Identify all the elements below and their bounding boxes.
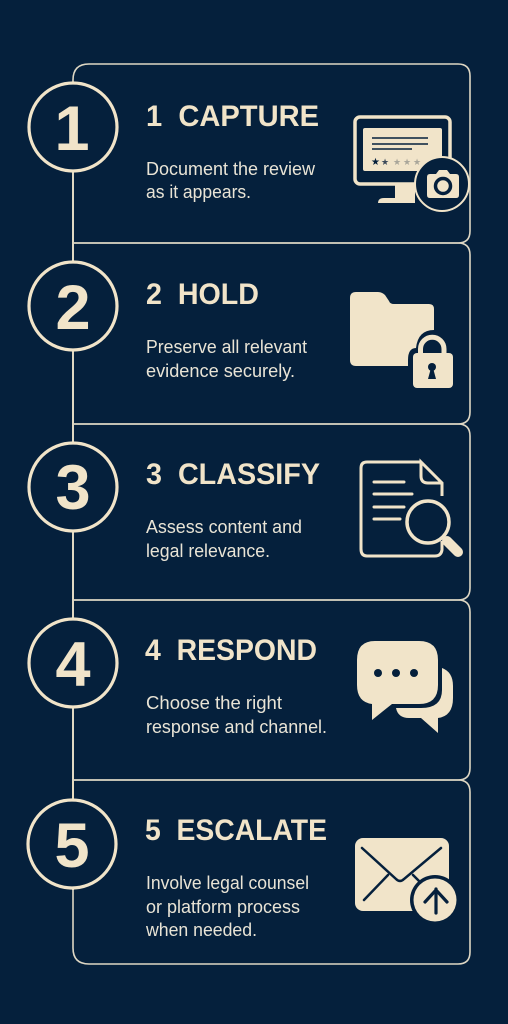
- icon: monitor with review and camera: ★: [393, 157, 401, 167]
- step 1 number: 1: [54, 94, 90, 164]
- icon: monitor with review and camera: ★: [371, 157, 380, 168]
- step 2 description: [146, 337, 307, 381]
- panel: step 1 capture: [29, 64, 470, 243]
- step 2 description: Preserve all relevant: [146, 337, 307, 357]
- icon: envelope with upload arrow: [355, 838, 460, 925]
- step 3 number: [29, 443, 117, 531]
- icon: chat bubbles: [357, 641, 453, 733]
- step 3 number: 3: [55, 453, 91, 523]
- step 1 number: [29, 83, 117, 171]
- step 4 description: [146, 693, 327, 737]
- step 1 description: as it appears.: [146, 182, 251, 202]
- icon: monitor with review and camera: [355, 117, 469, 211]
- step 1 description: Document the review: [146, 159, 316, 179]
- icon: document with magnifying glass: [361, 462, 458, 556]
- step 5 number: 5: [54, 811, 90, 881]
- icon: monitor with review and camera: ★: [413, 157, 421, 167]
- step 3 description: legal relevance.: [146, 541, 270, 561]
- step 4 description: Choose the right: [146, 693, 282, 713]
- step 3 heading: 3 CLASSIFY: [146, 458, 320, 491]
- step 5 number: [28, 800, 116, 888]
- icon: monitor with review and camera: ★: [381, 157, 389, 167]
- panel: step 2 hold: [29, 243, 470, 424]
- step 2 heading: 2 HOLD: [146, 278, 259, 311]
- panel: step 4 respond: [29, 600, 470, 780]
- step 1 description: [146, 159, 316, 202]
- step 1 heading: 1 CAPTURE: [146, 100, 319, 133]
- step 4 number: [29, 619, 117, 707]
- timeline connector: [72, 83, 74, 890]
- icon: folder with padlock: [350, 292, 453, 388]
- step 3 description: Assess content and: [146, 517, 302, 537]
- step 2 number: 2: [55, 273, 91, 343]
- step 4 description: response and channel.: [146, 717, 327, 737]
- step 5 description: or platform process: [146, 897, 300, 917]
- icon: monitor with review and camera: ★: [403, 157, 411, 167]
- step 5 description: [145, 873, 309, 940]
- step 5 heading: 5 ESCALATE: [145, 814, 327, 847]
- step 4 number: 4: [55, 630, 91, 700]
- step 4 heading: 4 RESPOND: [145, 634, 317, 667]
- step 3 description: [146, 517, 302, 561]
- step 2 description: evidence securely.: [146, 361, 295, 381]
- step 5 description: when needed.: [145, 920, 257, 940]
- panel: step 3 classify: [29, 424, 470, 600]
- step 5 description: Involve legal counsel: [146, 873, 309, 893]
- panel: step 5 escalate: [28, 780, 470, 964]
- step 2 number: [29, 262, 117, 350]
